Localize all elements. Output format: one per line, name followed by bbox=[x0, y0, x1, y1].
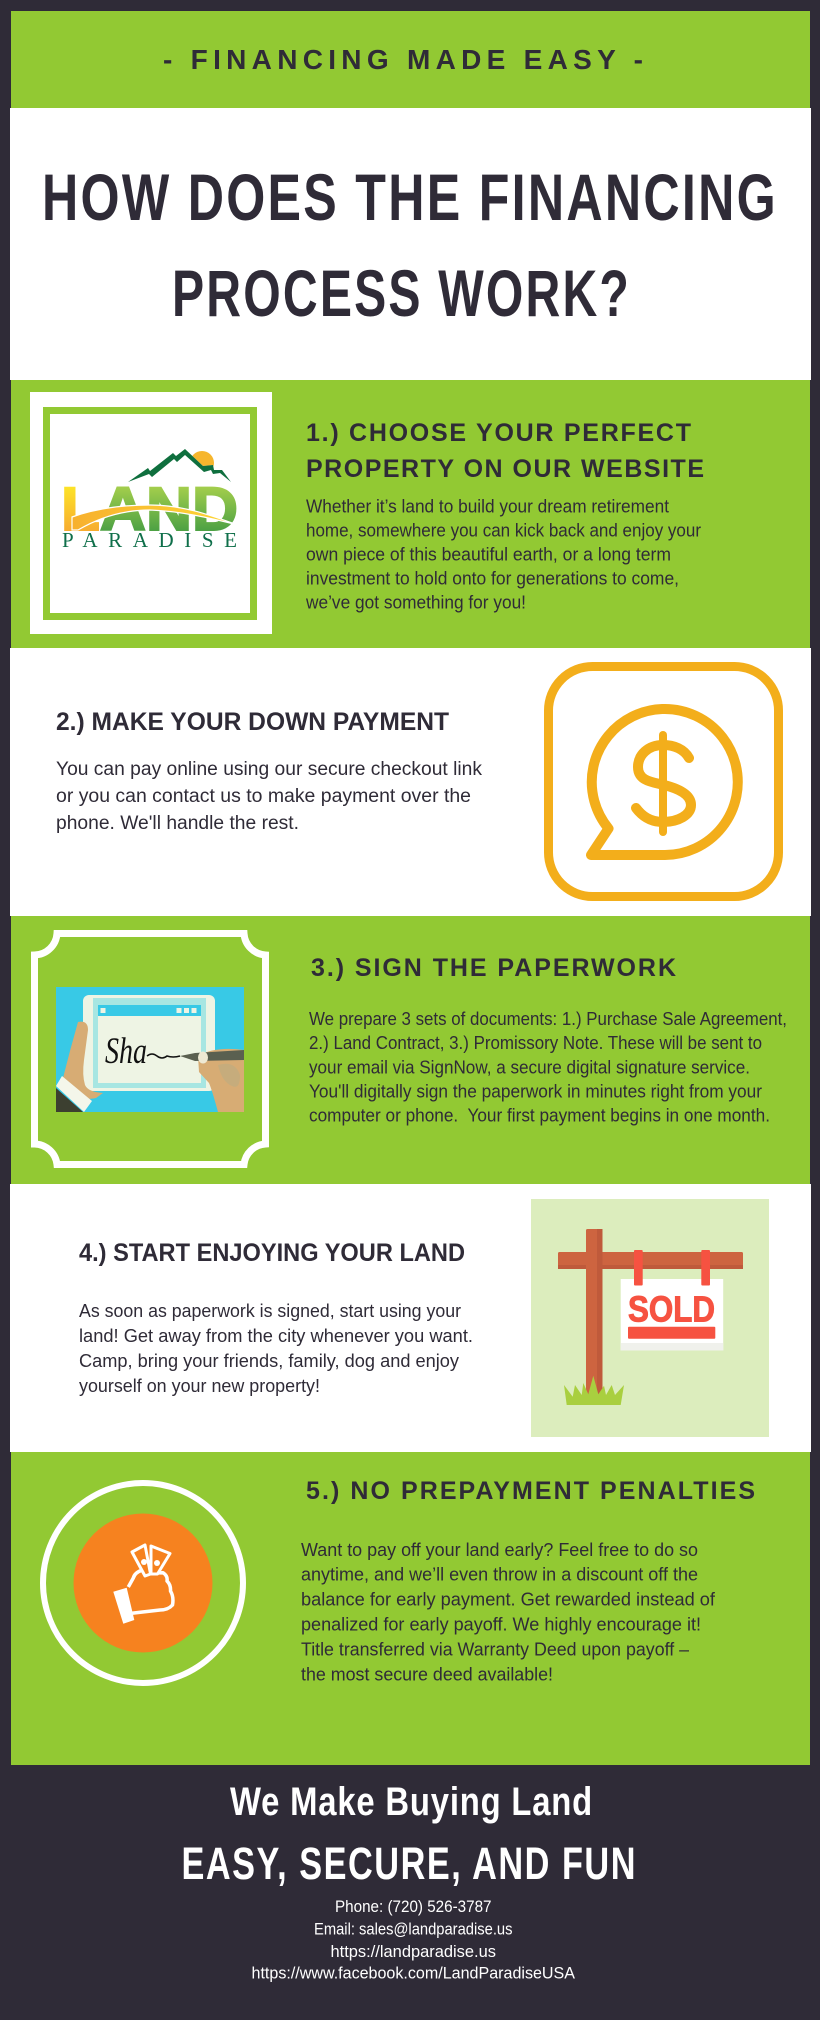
text: step 3 body: We prepare 3 sets of documents: 1.) Purchase Sale Agreement, bbox=[309, 1008, 787, 1029]
text: step 1 body bbox=[305, 496, 701, 612]
panel: step 2 down payment bbox=[10, 648, 811, 916]
footer contact details: https://www.facebook.com/LandParadiseUSA bbox=[252, 1964, 576, 1982]
text: step 5 body: anytime, and we’ll even throw in a discount off the bbox=[301, 1564, 698, 1584]
text: step 1 body: Whether it’s land to build your dream retirement bbox=[306, 496, 669, 516]
icon: Land Paradise logo bbox=[61, 449, 238, 552]
icon: tablet signature illustration bbox=[56, 987, 244, 1112]
text: step 5 body: the most secure deed available! bbox=[301, 1664, 553, 1684]
text: step 4 body: As soon as paperwork is signed, start using your bbox=[79, 1300, 461, 1321]
icon: tablet signature illustration: Sha bbox=[105, 1031, 147, 1072]
panel: step 4 enjoy land bbox=[10, 1184, 811, 1452]
heading: step 1: 1.) CHOOSE YOUR PERFECT bbox=[306, 419, 691, 447]
heading: step 3: 3.) SIGN THE PAPERWORK bbox=[311, 954, 676, 982]
text: step 4 body: yourself on your new property! bbox=[79, 1375, 320, 1396]
text: step 3 body: You'll digitally sign the paperwork in minutes right from your bbox=[309, 1080, 762, 1102]
heading: step 2: 2.) MAKE YOUR DOWN PAYMENT bbox=[56, 708, 449, 736]
icon: ring with hand holding cash bbox=[43, 1483, 243, 1683]
panel: step 5 no prepayment penalties bbox=[11, 1452, 810, 1765]
icon: Land Paradise logo: PARADISE bbox=[62, 528, 237, 552]
header band bbox=[11, 11, 810, 108]
text: step 4 body bbox=[79, 1300, 473, 1396]
text: step 3 body: 2.) Land Contract, 3.) Promissory Note. These will be sent to bbox=[309, 1032, 762, 1053]
text: step 1 body: investment to hold onto for generations to come, bbox=[306, 568, 679, 588]
text: step 4 body: land! Get away from the city whenever you want. bbox=[79, 1325, 473, 1346]
panel: step 3 sign paperwork bbox=[11, 916, 810, 1184]
text: step 3 body: computer or phone. Your first payment begins in one month. bbox=[309, 1104, 770, 1126]
icon: Land Paradise logo: LAND bbox=[61, 475, 238, 543]
text: step 2 body: You can pay online using our secure checkout link bbox=[56, 759, 482, 780]
text: step 5 body: penalized for early payoff. We highly encourage it! bbox=[301, 1614, 701, 1634]
title panel: PROCESS WORK? bbox=[172, 256, 631, 330]
footer tagline bbox=[182, 1780, 637, 1889]
heading: step 1 bbox=[306, 419, 704, 483]
text: step 5 body: balance for early payment. Get rewarded instead of bbox=[301, 1588, 716, 1610]
icon: sold sign: SOLD bbox=[628, 1288, 715, 1330]
icon: sold sign bbox=[531, 1199, 769, 1437]
heading: step 4: 4.) START ENJOYING YOUR LAND bbox=[79, 1239, 465, 1267]
text: step 5 body bbox=[301, 1539, 716, 1684]
text: step 2 body bbox=[56, 759, 482, 834]
footer contact details: Phone: (720) 526-3787 bbox=[335, 1897, 492, 1916]
logo frame bbox=[30, 392, 272, 634]
title panel bbox=[10, 108, 811, 380]
footer contact details: https://landparadise.us bbox=[330, 1942, 496, 1961]
text: step 2 body: or you can contact us to make payment over the bbox=[56, 786, 471, 807]
footer tagline: We Make Buying Land bbox=[230, 1780, 593, 1824]
text: step 2 body: phone. We'll handle the rest. bbox=[56, 813, 299, 834]
text: step 3 body: your email via SignNow, a secure digital signature service. bbox=[309, 1056, 750, 1078]
ticket frame bbox=[34, 934, 266, 1164]
text: step 5 body: Want to pay off your land early? Feel free to do so bbox=[301, 1539, 698, 1560]
text: step 4 body: Camp, bring your friends, family, dog and enjoy bbox=[79, 1350, 460, 1371]
heading: step 1: PROPERTY ON OUR WEBSITE bbox=[306, 455, 704, 483]
text: step 1 body: own piece of this beautiful earth, or a long term bbox=[306, 544, 671, 564]
text: step 3 body bbox=[309, 1008, 787, 1126]
icon: dollar speech bubble bbox=[548, 666, 778, 896]
heading: step 5: 5.) NO PREPAYMENT PENALTIES bbox=[306, 1477, 755, 1505]
text: step 1 body: home, somewhere you can kick back and enjoy your bbox=[306, 520, 701, 540]
text: step 5 body: Title transferred via Warranty Deed upon payoff – bbox=[301, 1638, 690, 1660]
text: step 1 body: we’ve got something for you! bbox=[305, 592, 526, 612]
header band: - FINANCING MADE EASY - bbox=[163, 44, 643, 75]
footer contact details: Email: sales@landparadise.us bbox=[314, 1920, 512, 1938]
panel: step 1 choose property bbox=[11, 380, 810, 648]
footer tagline: EASY, SECURE, AND FUN bbox=[182, 1838, 637, 1889]
footer contact details bbox=[252, 1897, 576, 1982]
